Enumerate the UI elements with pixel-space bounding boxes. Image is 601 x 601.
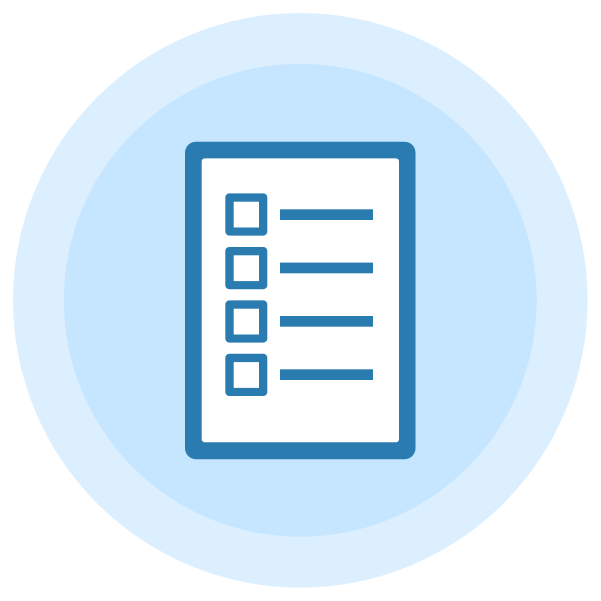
checklist item 1 — [225, 193, 373, 236]
checklist item 4 — [225, 354, 373, 396]
checklist item 3 — [225, 300, 373, 343]
document page — [185, 142, 416, 459]
inner circle — [64, 64, 537, 537]
checklist item 2 — [225, 247, 373, 289]
